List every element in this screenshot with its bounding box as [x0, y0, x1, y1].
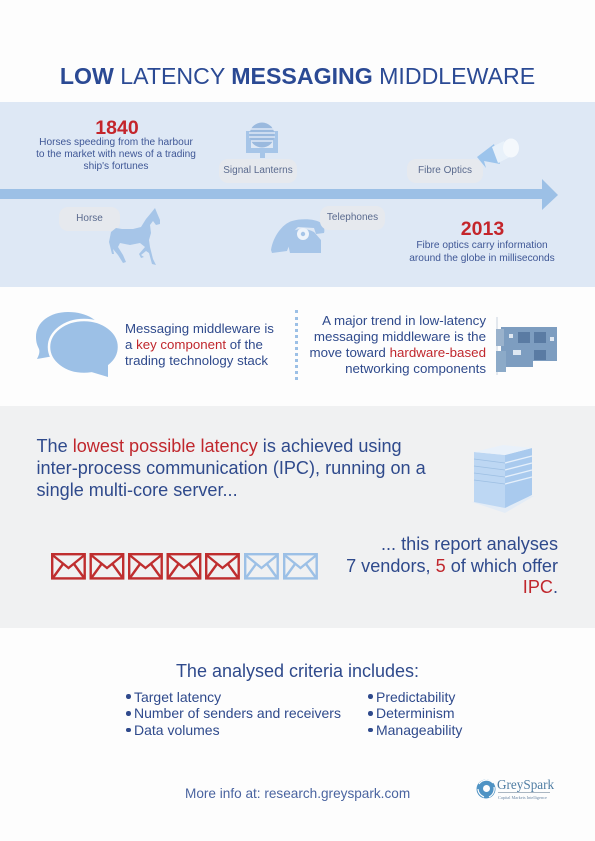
- timeline arrow: [0, 179, 558, 210]
- label: Horse: [59, 207, 120, 231]
- text: lowest possible latency: single multi-core server...: [36, 480, 238, 500]
- icon: telephone: [271, 219, 324, 253]
- text: vendors: IPC.: [523, 577, 558, 597]
- text: lowest possible latency: [36, 436, 426, 500]
- text: 2013 description: Fibre optics carry information: [416, 240, 548, 251]
- text: key component: Messaging middleware is: [125, 321, 274, 336]
- label: Signal Lanterns: Signal Lanterns: [223, 165, 293, 176]
- label: Telephones: Telephones: [327, 212, 378, 223]
- text: key component: trading technology stack: [125, 353, 268, 368]
- text: 2013 description: around the globe in milliseconds: [409, 253, 555, 264]
- label: Fibre Optics: [407, 159, 483, 183]
- criteria list right: Manageability: [376, 722, 462, 738]
- text: vendors: 7 vendors, 5 of which offer: [346, 556, 558, 576]
- text: 1840 description: ship's fortunes: [84, 161, 148, 172]
- label: Telephones: [320, 206, 385, 230]
- logo swirl: [476, 780, 496, 798]
- criteria list right: Predictability: [376, 688, 455, 704]
- criteria list right: [368, 688, 462, 738]
- logo: GreySpark: [476, 777, 554, 800]
- icon: speech bubbles: [36, 312, 118, 377]
- vendor envelopes: [51, 553, 318, 580]
- text: 1840: 1840: [95, 116, 139, 138]
- logo tagline: [498, 792, 550, 800]
- icon: server: [473, 448, 534, 513]
- panel: IPC: [0, 406, 595, 628]
- text: lowest possible latency: inter-process communication (IPC), running on a: [36, 458, 426, 478]
- panel: timeline: [0, 102, 595, 287]
- criteria list left: [126, 688, 341, 738]
- title: LOW LATENCY MESSAGING MIDDLEWARE: [60, 63, 535, 89]
- text: 2013 description: [409, 240, 555, 264]
- text: 1840 description: to the market with news of a trading: [36, 149, 196, 160]
- heading: criteria: The analysed criteria includes:: [176, 661, 419, 681]
- icon: horse: [109, 208, 160, 265]
- text: hardware trend: A major trend in low-latency: [322, 313, 486, 328]
- icon: fibre optic cable: [477, 138, 519, 168]
- text: 1840 description: [36, 137, 196, 172]
- text: 1840 description: Horses speeding from the harbour: [39, 137, 193, 148]
- text: vendors: [346, 534, 558, 597]
- label: Horse: Horse: [76, 213, 103, 224]
- text: hardware trend: networking components: [345, 361, 486, 376]
- icon: signal lantern: [246, 122, 278, 158]
- criteria list left: Target latency: [134, 688, 221, 704]
- text: 2013: 2013: [461, 218, 504, 240]
- criteria list left: Data volumes: [134, 722, 220, 738]
- label: Fibre Optics: Fibre Optics: [418, 165, 472, 176]
- text: hardware trend: [309, 313, 486, 376]
- text: hardware trend: messaging middleware is the: [314, 329, 486, 344]
- logo tagline: Capital Markets Intelligence: [498, 794, 547, 800]
- text: vendors: ... this report analyses: [381, 534, 558, 554]
- dotted divider: [295, 310, 298, 380]
- criteria list right: Determinism: [376, 705, 455, 721]
- text: lowest possible latency: The lowest possible latency is achieved using: [36, 436, 402, 456]
- criteria list left: Number of senders and receivers: [134, 705, 341, 721]
- text: hardware trend: move toward hardware-based: [309, 345, 486, 360]
- icon: network card: [496, 317, 557, 375]
- text: key component: a key component of the: [125, 337, 263, 352]
- logo wordmark: GreySpark: [497, 777, 554, 792]
- label: Signal Lanterns: [219, 159, 297, 183]
- text: more info: More info at: research.greyspark.com: [185, 786, 410, 801]
- text: key component: [125, 321, 274, 368]
